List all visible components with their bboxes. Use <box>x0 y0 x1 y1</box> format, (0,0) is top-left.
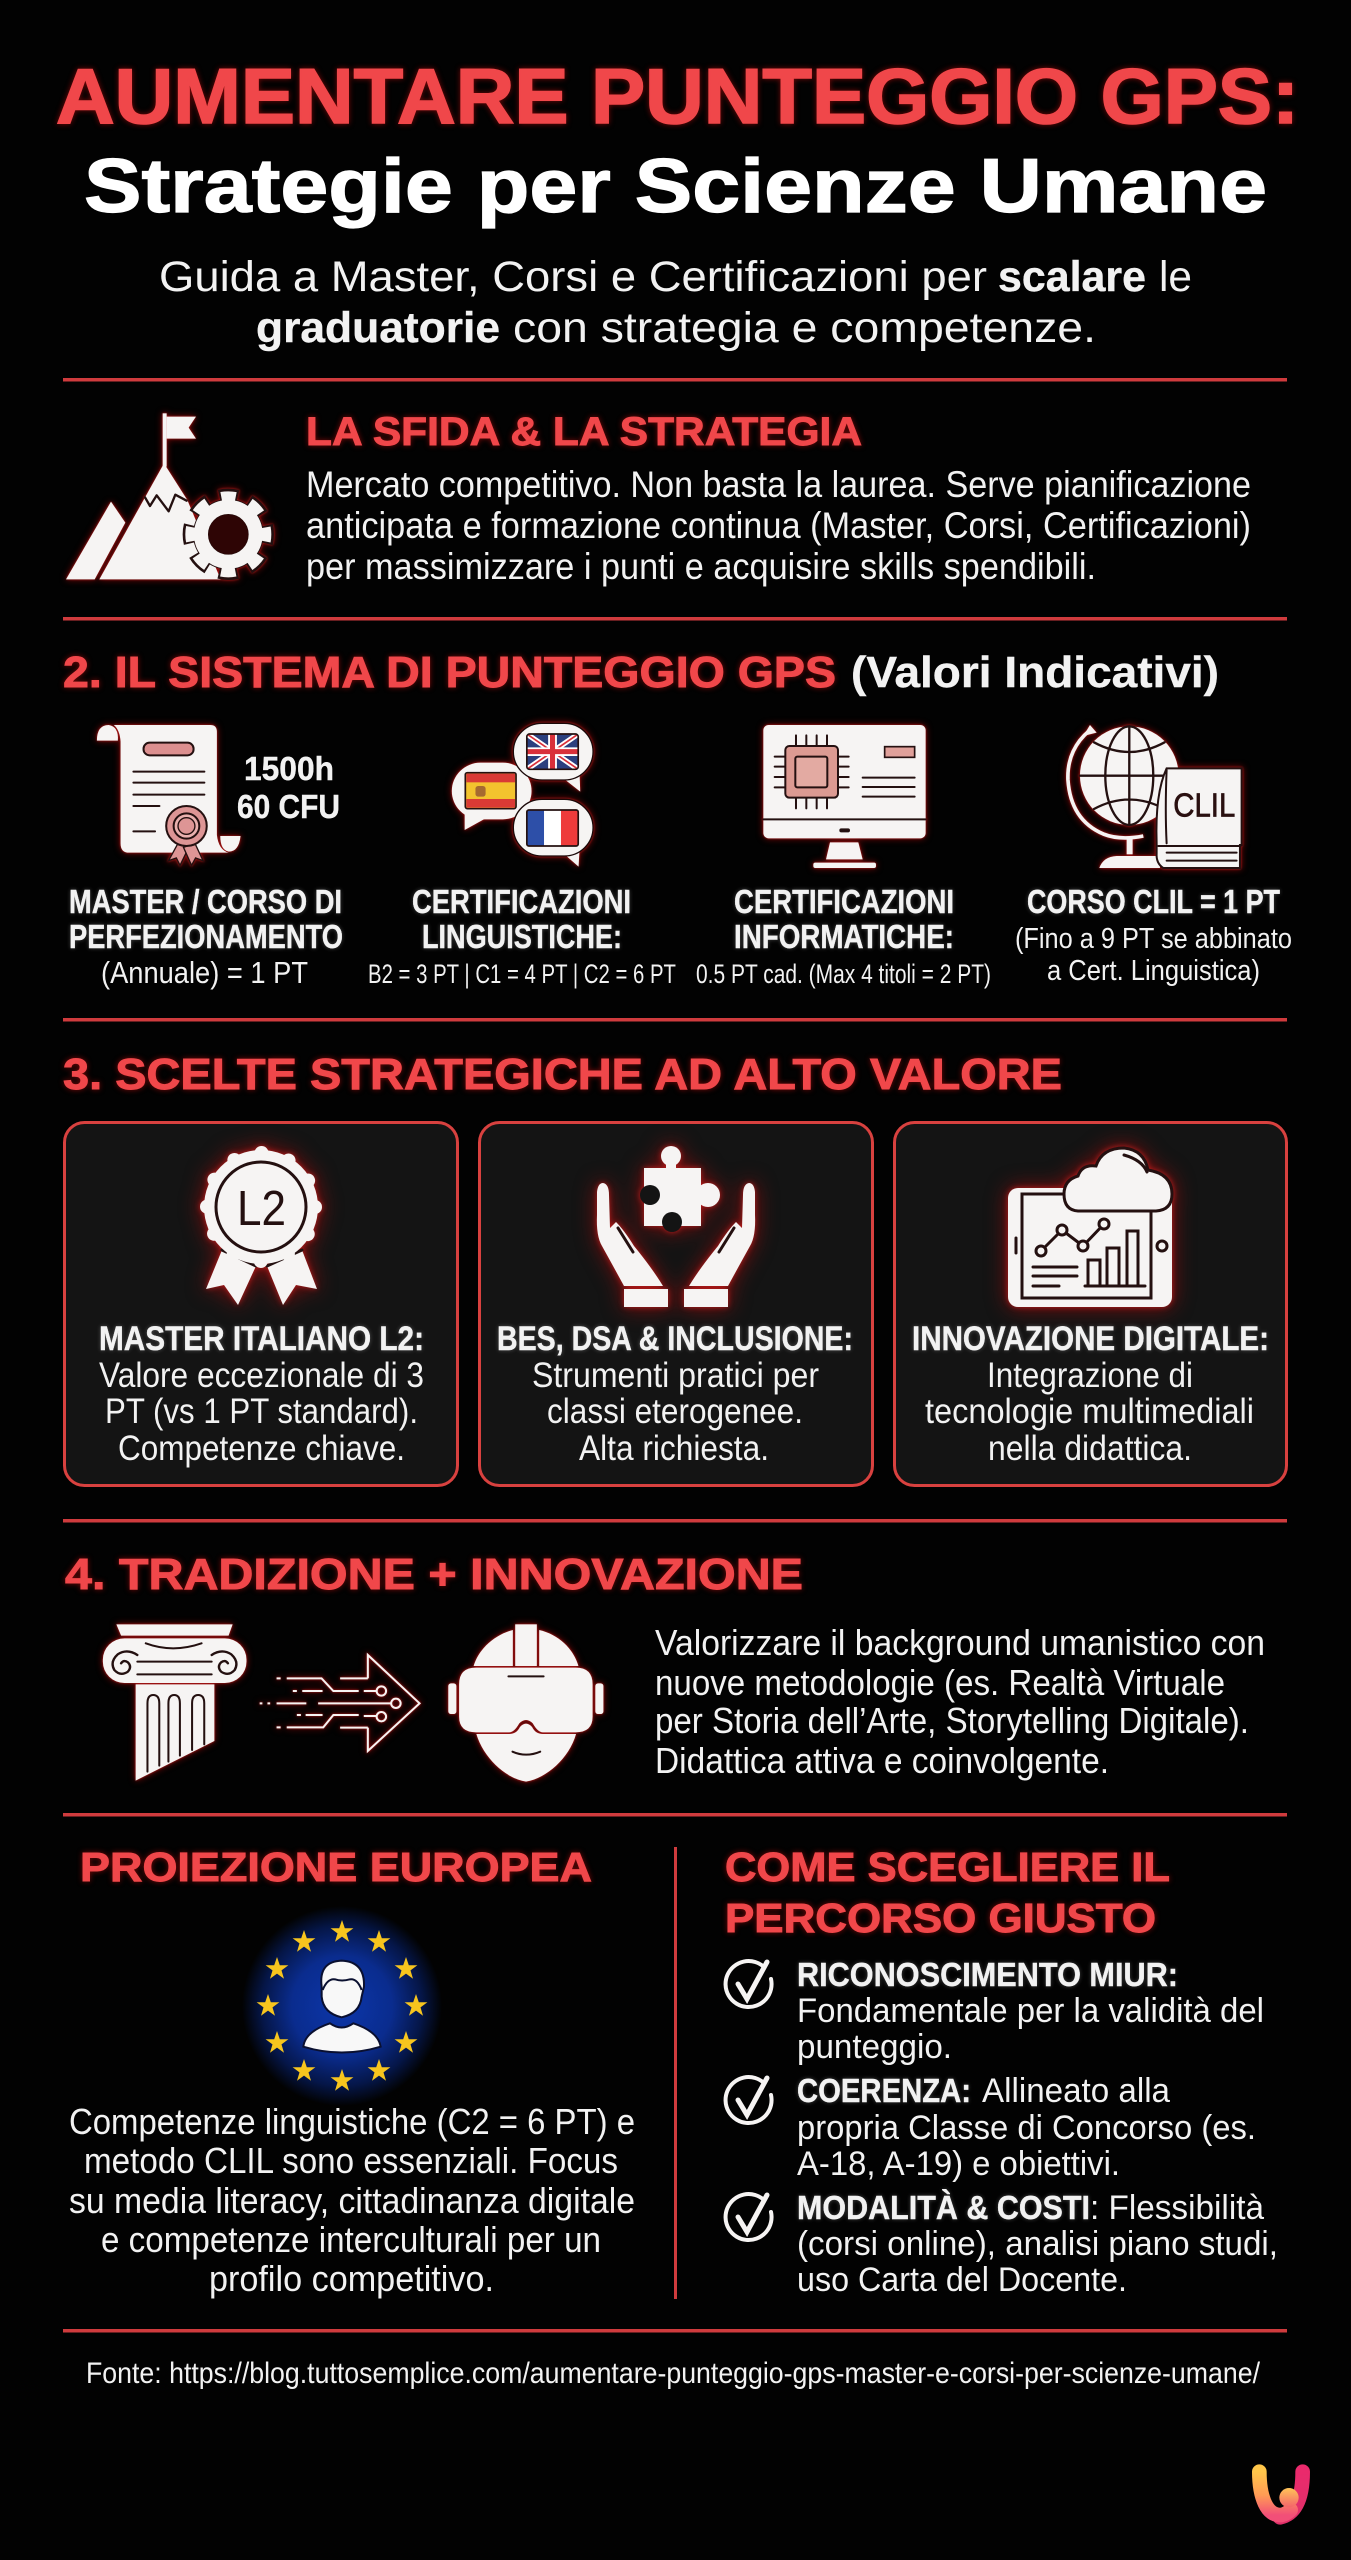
text block: tradizione e innovazione: nuove metodologie (es. Realtà Virtuale <box>655 1662 1225 1703</box>
card: master italiano L2 <box>64 1122 458 1486</box>
item: riconoscimento MIUR <box>797 1956 1264 2066</box>
item: certificazioni linguistiche: B2 = 3 PT | C1 = 4 PT | C2 = 6 PT <box>368 959 676 989</box>
item: coerenza: propria Classe di Concorso (es. <box>797 2109 1256 2147</box>
heading: come scegliere: PERCORSO GIUSTO <box>725 1895 1156 1941</box>
label: 1500h 60 CFU: 60 CFU <box>237 788 340 825</box>
icon: check one <box>726 1961 772 2007</box>
text block: la sfida: anticipata e formazione continua (Master, Corsi, Certificazioni) <box>306 505 1251 546</box>
icon: monitor with chip <box>763 725 926 868</box>
item: corso CLIL: (Fino a 9 PT se abbinato <box>1015 923 1292 955</box>
icon: VR headset head <box>448 1624 603 1782</box>
text block: proiezione europea: metodo CLIL sono essenziali. Focus <box>84 2140 618 2181</box>
text block: innovazione digitale: tecnologie multimediali <box>925 1392 1254 1431</box>
icon: ionic column <box>103 1624 246 1781</box>
item: certificazioni linguistiche <box>368 883 676 989</box>
subtitle: scalare <box>998 253 1146 301</box>
item: master <box>69 883 343 990</box>
text block: proiezione europea: e competenze interculturali per un <box>101 2219 601 2260</box>
icon: EU stars with person <box>242 1906 442 2106</box>
item: modalità e costi <box>797 2189 1278 2299</box>
item: modalità e costi: (corsi online), analisi piano studi, <box>797 2225 1278 2263</box>
item: certificazioni informatiche: CERTIFICAZIONI <box>734 883 954 920</box>
text block: master italiano L2: Valore eccezionale di 3 <box>99 1356 424 1395</box>
heading: sistema di punteggio: (Valori Indicativi) <box>851 648 1219 697</box>
icon: tablet with cloud <box>1008 1148 1172 1307</box>
arrow: digital transition <box>260 1655 420 1751</box>
subtitle: graduatorie <box>256 304 500 352</box>
icon: check three <box>726 2194 772 2240</box>
subtitle: con strategia e competenze. <box>513 304 1096 352</box>
text block: proiezione europea: su media literacy, cittadinanza digitale <box>69 2180 635 2221</box>
text block: la sfida: per massimizzare i punti e acquisire skills spendibili. <box>306 546 1096 587</box>
item: coerenza <box>797 2072 1256 2183</box>
panel: la sfida e la strategia <box>66 410 1251 587</box>
text block: tradizione e innovazione: per Storia dell’Arte, Storytelling Digitale). <box>655 1700 1249 1741</box>
panel: come scegliere il percorso <box>725 1844 1278 2299</box>
text block: BES DSA inclusione <box>497 1320 853 1468</box>
subtitle: Guida a Master, Corsi e Certificazioni per <box>159 253 987 301</box>
icon: L2 medal: L2 <box>237 1182 286 1236</box>
text block: tradizione e innovazione: Didattica attiva e coinvolgente. <box>655 1740 1109 1781</box>
item: riconoscimento MIUR: punteggio. <box>797 2028 952 2066</box>
item: corso CLIL: CORSO CLIL = 1 PT <box>1027 883 1280 920</box>
title <box>56 52 1299 229</box>
text block: BES DSA inclusione: Alta richiesta. <box>579 1429 769 1468</box>
text block: tradizione e innovazione <box>655 1622 1265 1781</box>
item: modalità e costi: uso Carta del Docente. <box>797 2261 1127 2299</box>
text block: innovazione digitale: Integrazione di <box>987 1356 1193 1395</box>
text block: BES DSA inclusione: BES, DSA & INCLUSIONE: <box>497 1320 853 1358</box>
card: innovazione digitale <box>894 1122 1286 1486</box>
subtitle: le <box>1159 253 1192 301</box>
icon: hands with puzzle <box>597 1146 755 1307</box>
logo <box>1259 2472 1303 2517</box>
item: certificazioni informatiche: 0.5 PT cad. (Max 4 titoli = 2 PT) <box>696 959 991 989</box>
item: coerenza: A-18, A-19) e obiettivi. <box>797 2145 1120 2183</box>
text block: innovazione digitale: INNOVAZIONE DIGITALE: <box>912 1320 1269 1358</box>
title: AUMENTARE PUNTEGGIO GPS: <box>56 52 1299 140</box>
heading: sistema di punteggio: 2. IL SISTEMA DI PUNTEGGIO GPS <box>63 648 836 697</box>
heading: sistema di punteggio <box>63 648 1219 697</box>
item: corso CLIL: a Cert. Linguistica) <box>1047 955 1260 987</box>
title: Strategie per Scienze Umane <box>84 144 1267 229</box>
item: corso CLIL <box>1015 883 1292 987</box>
heading: tradizione e innovazione: 4. TRADIZIONE + INNOVAZIONE <box>65 1550 803 1599</box>
item: coerenza: Allineato alla <box>982 2072 1170 2110</box>
text block: proiezione europea: profilo competitivo. <box>209 2258 494 2299</box>
text block: la sfida <box>306 464 1251 587</box>
item: certificazioni informatiche: INFORMATICHE: <box>734 918 954 955</box>
text block: master italiano L2: MASTER ITALIANO L2: <box>99 1320 424 1358</box>
heading: come scegliere <box>725 1844 1170 1941</box>
text block: master italiano L2: PT (vs 1 PT standard). <box>105 1392 418 1431</box>
item: coerenza: COERENZA: <box>797 2072 971 2109</box>
item: riconoscimento MIUR: Fondamentale per la validità del <box>797 1992 1264 2030</box>
item: certificazioni linguistiche: CERTIFICAZIONI <box>412 883 631 920</box>
icon: check two <box>726 2077 772 2123</box>
heading: scelte strategiche: 3. SCELTE STRATEGICHE AD ALTO VALORE <box>63 1050 1062 1099</box>
card: BES DSA inclusione <box>480 1122 872 1486</box>
text block: la sfida: Mercato competitivo. Non basta la laurea. Serve pianificazione <box>306 464 1251 505</box>
panel: proiezione europea <box>69 1844 635 2299</box>
text block: tradizione e innovazione: Valorizzare il background umanistico con <box>655 1622 1265 1663</box>
icon: globe and CLIL book: CLIL <box>1173 788 1235 825</box>
text block: proiezione europea <box>69 2101 635 2299</box>
icon: diploma scroll <box>97 725 241 865</box>
heading: la sfida: LA SFIDA & LA STRATEGIA <box>306 410 862 454</box>
item: modalità e costi: MODALITÀ & COSTI <box>797 2189 1090 2226</box>
label: 1500h 60 CFU: 1500h <box>244 750 334 787</box>
item: master: MASTER / CORSO DI <box>69 883 342 920</box>
text block: master italiano L2: Competenze chiave. <box>118 1429 405 1468</box>
icon: L2 medal <box>204 1150 318 1305</box>
item: certificazioni informatiche <box>696 883 991 989</box>
text block: innovazione digitale <box>912 1320 1269 1468</box>
text block: BES DSA inclusione: Strumenti pratici per <box>532 1356 819 1395</box>
text block: innovazione digitale: nella didattica. <box>988 1429 1192 1468</box>
text block: BES DSA inclusione: classi eterogenee. <box>547 1392 803 1431</box>
text block: proiezione europea: Competenze linguistiche (C2 = 6 PT) e <box>69 2101 635 2142</box>
heading: come scegliere: COME SCEGLIERE IL <box>725 1844 1170 1890</box>
icon: globe and CLIL book <box>1068 725 1242 868</box>
subtitle <box>159 253 1192 352</box>
label: 1500h 60 CFU <box>237 750 340 825</box>
panel: scelte strategiche <box>63 1050 1286 1486</box>
item: master: (Annuale) = 1 PT <box>101 955 308 990</box>
item: modalità e costi: : Flessibilità <box>1090 2189 1264 2227</box>
item: riconoscimento MIUR: RICONOSCIMENTO MIUR: <box>797 1956 1178 1993</box>
icon: language flags <box>452 723 593 867</box>
item: master: PERFEZIONAMENTO <box>69 918 343 955</box>
panel: tradizione e innovazione <box>65 1550 1265 1782</box>
icon: mountain with flag and gear <box>66 413 267 579</box>
item: certificazioni linguistiche: LINGUISTICHE: <box>422 918 622 955</box>
panel: sistema di punteggio <box>63 648 1292 990</box>
text block: master italiano L2 <box>99 1320 424 1468</box>
heading: proiezione europea: PROIEZIONE EUROPEA <box>80 1844 592 1890</box>
